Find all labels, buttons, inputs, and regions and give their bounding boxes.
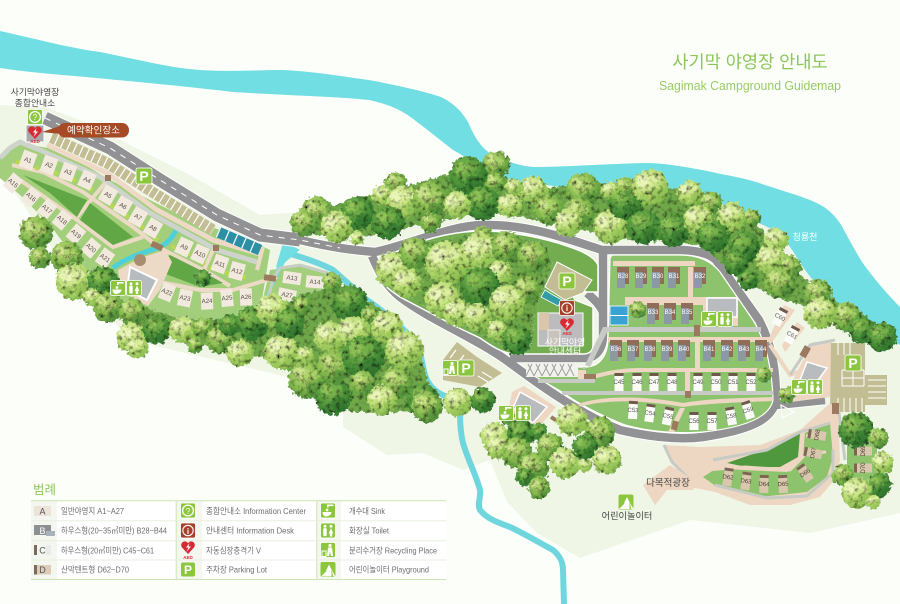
callout: reservation check point xyxy=(42,123,129,138)
house sites C45-C61: C52 xyxy=(745,380,757,386)
tent sites D62-D70: D70 xyxy=(861,462,867,474)
campground A site cards: A12 xyxy=(231,267,244,276)
wooded lawn xyxy=(727,433,800,467)
campground A site cards: A17 xyxy=(40,203,54,216)
campground A site cards: A4 xyxy=(82,176,92,185)
icon: information center: ? xyxy=(33,113,38,122)
general information center label xyxy=(11,87,59,108)
wall upper xyxy=(713,423,830,460)
tent sites D62-D70: D65 xyxy=(777,482,789,488)
house sites B28-B44: B38 xyxy=(645,347,656,353)
information center building xyxy=(538,313,583,346)
icon: AED at information center: AED xyxy=(30,139,40,144)
icon: parking east xyxy=(845,355,861,371)
house sites C45-C61: C51 xyxy=(727,380,739,386)
legend: site C: C xyxy=(39,546,46,556)
legend: site B: B xyxy=(39,526,46,536)
inner stream xyxy=(113,227,178,268)
legend: site A: 일반야영지 A1~A27 xyxy=(61,506,124,516)
campground A site cards: A9 xyxy=(179,243,189,252)
legend: sink xyxy=(320,503,386,518)
house sites C45-C61: C59 xyxy=(742,406,755,416)
cabin sites C60 C61 paths xyxy=(768,305,805,375)
campground A site cards: A25 xyxy=(221,294,233,303)
house sites C45-C61: C54 xyxy=(644,410,656,418)
house sites C45-C61: C49 xyxy=(692,380,704,386)
campground A site cards: A6 xyxy=(118,202,128,212)
terrace wall xyxy=(664,445,690,480)
general information center label: 종합안내소 xyxy=(15,98,55,108)
bridges xyxy=(105,175,276,282)
campground A site cards: A23 xyxy=(179,294,192,303)
house sites C45-C61: C50 xyxy=(710,380,722,386)
tent sites D62-D70: D69 xyxy=(861,445,867,457)
legend: site C xyxy=(34,545,154,556)
house sites C45-C61: C45 xyxy=(613,380,625,386)
title: 사기막 야영장 안내도 xyxy=(672,52,828,72)
legend: recycling xyxy=(320,542,437,558)
beige strip xyxy=(47,145,260,254)
house sites B28-B44: B35 xyxy=(682,310,693,316)
tent sites D62-D70: D63 xyxy=(740,478,752,486)
campground A site cards: A13 xyxy=(286,274,298,283)
house sites C45-C61: C55 xyxy=(662,413,674,421)
campground A east lawn xyxy=(257,266,345,322)
house sites B28-B44: B44 xyxy=(756,347,767,353)
campground A site cards: A26 xyxy=(240,294,252,301)
legend: site D: 산막텐트형 D62~D70 xyxy=(61,564,129,574)
east access path xyxy=(838,405,845,460)
campground A site cards: A3 xyxy=(63,168,73,177)
campground A site cards: A7 xyxy=(133,213,143,223)
icon: parking east: P xyxy=(848,355,858,371)
beige paths xyxy=(705,435,826,470)
trees: south cluster xyxy=(411,388,621,499)
trees: central forest xyxy=(375,226,553,355)
campground A site cards: A2 xyxy=(44,161,54,170)
junction triangle xyxy=(781,405,794,418)
icon: playground xyxy=(618,494,634,510)
legend: site A: A xyxy=(39,506,46,516)
legend: playground: 어린이놀이터 Playground xyxy=(349,564,429,574)
campground A site cards: A8 xyxy=(148,224,158,234)
beige terrace xyxy=(664,403,840,505)
island parking xyxy=(541,262,592,306)
campground A site cards: A19 xyxy=(69,228,83,241)
icon: information center xyxy=(28,110,42,124)
parking A stalls xyxy=(50,137,260,250)
east bridge xyxy=(799,345,811,358)
legend: site D: D xyxy=(39,565,46,575)
plaza xyxy=(118,250,172,306)
paths and walls in B and C xyxy=(538,261,773,432)
icon: information desk xyxy=(560,300,574,316)
lawn D lower xyxy=(703,423,833,497)
annex lower xyxy=(548,330,560,346)
trees: east cluster and camp trees xyxy=(630,302,894,509)
tent sites D62-D70: D62 xyxy=(722,474,734,482)
legend: site B: 하우스형(20~35㎡미만) B28~B44 xyxy=(61,526,167,536)
lawns xyxy=(23,175,223,287)
site dots xyxy=(16,160,246,279)
legend: information desk xyxy=(180,523,295,538)
icon: AED at information desk xyxy=(560,318,574,336)
legend: information center: ? xyxy=(186,507,191,516)
campground A site cards: A21 xyxy=(98,252,112,265)
gray walls xyxy=(538,327,773,395)
house sites B28-B44: B34 xyxy=(665,310,676,316)
house sites C45-C61: C57 xyxy=(706,419,718,425)
callout: reservation check point: 예약확인장소 xyxy=(67,125,120,137)
stream xyxy=(284,252,564,604)
east service plaza xyxy=(783,340,835,403)
legend: information center xyxy=(180,503,306,518)
house sites C45-C61: C48 xyxy=(666,380,678,386)
toilet building xyxy=(127,267,157,300)
house sites B28-B44: B40 xyxy=(679,347,690,353)
house sites B28-B44: B42 xyxy=(722,347,733,353)
icons: sink and toilet east xyxy=(792,380,822,394)
house sites B28-B44: B30 xyxy=(653,274,664,280)
tent sites D62-D70 xyxy=(721,427,872,493)
legend: site D xyxy=(34,564,129,575)
legend: AED: AED xyxy=(183,555,193,560)
legend title: 범례 xyxy=(33,483,56,497)
central island lawn xyxy=(380,231,598,354)
campground A site cards: A22 xyxy=(160,287,174,298)
icons: sink and toilet centre xyxy=(702,312,732,326)
tent sites D62-D70: D64 xyxy=(758,482,770,488)
house sites B28-B44 xyxy=(610,267,767,361)
legend: toilet xyxy=(320,523,390,538)
road A outline xyxy=(45,118,300,240)
campground A site cards: A20 xyxy=(84,242,98,255)
east wall xyxy=(268,265,328,300)
icon: parking island: P xyxy=(562,273,572,289)
campground A lawn xyxy=(0,142,345,324)
wall lower xyxy=(715,450,833,498)
stream wedge and wall xyxy=(258,243,298,318)
house sites B28-B44: B43 xyxy=(739,347,750,353)
icons: sink and toilet south xyxy=(498,406,530,420)
general information center building xyxy=(26,125,44,142)
roads xyxy=(45,118,825,438)
west parking lot xyxy=(443,342,502,387)
legend: toilet: 화장실 Toilet xyxy=(349,526,390,536)
campground A site cards: A10 xyxy=(193,249,207,260)
legend: sink: 개수대 Sink xyxy=(349,506,386,516)
road outline xyxy=(260,225,825,438)
house sites B28-B44: B36 xyxy=(611,347,622,353)
road surface xyxy=(260,225,825,438)
house sites C45-C61 xyxy=(613,306,802,430)
campground A site cards xyxy=(3,150,324,310)
round feature xyxy=(134,254,146,266)
south toilet building xyxy=(508,386,560,432)
icon: parking A xyxy=(136,168,152,184)
plaza label: 다목적광장 xyxy=(646,477,690,489)
house sites C45-C61: C56 xyxy=(688,419,700,425)
house sites B28-B44: B41 xyxy=(704,347,715,353)
accessible stalls xyxy=(541,290,562,306)
wall along road xyxy=(0,142,257,262)
title xyxy=(659,52,841,93)
icons: sink and toilet A xyxy=(110,280,142,296)
icons: recycling and parking west: P xyxy=(461,360,471,376)
icons: recycling and parking west xyxy=(442,360,474,376)
land: pale green ground xyxy=(0,105,900,558)
house sites B28-B44: B31 xyxy=(669,274,680,280)
legend: parking: P xyxy=(184,563,192,577)
campground A site cards: A27 xyxy=(281,291,294,300)
trees: south-west forest xyxy=(19,216,439,416)
accessible parking blue xyxy=(610,306,628,325)
legend table xyxy=(31,501,446,580)
legend: recycling: 분리수거장 Recycling Place xyxy=(349,546,437,556)
lane marks xyxy=(45,118,340,248)
house sites B28-B44: B39 xyxy=(662,347,673,353)
legend: information center: 종합안내소 Information Center xyxy=(206,506,306,516)
campground A site cards: A16 xyxy=(24,191,38,204)
campground A site cards: A24 xyxy=(201,298,213,305)
house sites C45-C61: C60 xyxy=(773,313,786,323)
east building xyxy=(800,362,827,387)
icon: information desk: i xyxy=(566,304,568,313)
icon: AED at information desk: AED xyxy=(562,331,572,336)
house sites C45-C61: C47 xyxy=(648,380,660,386)
legend xyxy=(31,483,446,580)
campground A site cards: A15 xyxy=(6,177,20,190)
legend: parking: 주차장 Parking Lot xyxy=(206,564,268,574)
legend: site A xyxy=(34,506,124,516)
house sites B28-B44: B33 xyxy=(648,310,659,316)
east parking lot xyxy=(830,343,887,412)
general information center label: 사기막야영장 xyxy=(11,87,59,97)
legend: AED xyxy=(181,541,261,560)
east lawn xyxy=(847,443,877,483)
house sites B28-B44: B32 xyxy=(695,274,706,280)
parking lot striped xyxy=(526,363,578,377)
annex xyxy=(539,313,549,330)
road A surface xyxy=(45,118,300,240)
house sites C45-C61: C53 xyxy=(627,408,639,414)
subtitle: Sagimak Campground Guidemap xyxy=(659,78,841,93)
icon: parking island xyxy=(559,273,575,289)
legend: AED: 자동심장충격기 V xyxy=(206,546,261,556)
label: information desk xyxy=(545,337,585,356)
house sites C45-C61: C58 xyxy=(725,413,738,421)
house sites C45-C61: C46 xyxy=(631,380,643,386)
campground A site cards: A14 xyxy=(309,279,321,287)
label: information desk: 사기막야영 xyxy=(545,337,585,347)
tent sites D62-D70: D66 xyxy=(799,468,812,479)
central toilet building xyxy=(707,298,737,317)
campground B and C lawn xyxy=(527,255,773,433)
house sites C45-C61: C61 xyxy=(785,331,798,341)
icon: parking A: P xyxy=(139,168,149,184)
river label: 청룡천 xyxy=(793,232,817,242)
legend: site B xyxy=(34,525,167,536)
multi-purpose plaza xyxy=(643,465,698,505)
campground A site cards: A11 xyxy=(214,259,227,270)
paths xyxy=(12,165,277,290)
house sites B28-B44: B37 xyxy=(628,347,639,353)
legend: information desk: 안내센터 Information Desk xyxy=(206,526,295,536)
house sites B28-B44: B29 xyxy=(636,274,647,280)
legend: site C: 하우스형(20㎡미만) C45~C61 xyxy=(61,546,154,556)
tent sites D62-D70: D68 xyxy=(814,429,822,441)
bridges xyxy=(584,325,700,431)
legend: parking xyxy=(181,562,268,577)
legend: playground xyxy=(320,562,429,577)
campground A site cards: A5 xyxy=(103,191,113,201)
house sites B28-B44: B28 xyxy=(618,274,629,280)
east walls xyxy=(790,340,835,375)
legend: information desk: i xyxy=(187,527,189,536)
campground D xyxy=(664,403,877,505)
trees: northern ridge xyxy=(290,151,897,352)
playground label: 어린이놀이터 xyxy=(602,511,652,521)
D bridge xyxy=(832,403,839,414)
campground A site cards: A18 xyxy=(55,214,69,227)
accessible parking xyxy=(218,232,260,250)
label: information desk: 안내센터 xyxy=(549,346,581,356)
campground A site cards: A1 xyxy=(23,156,33,165)
icon: AED at information center xyxy=(28,126,42,144)
tent sites D62-D70: D67 xyxy=(810,447,818,459)
